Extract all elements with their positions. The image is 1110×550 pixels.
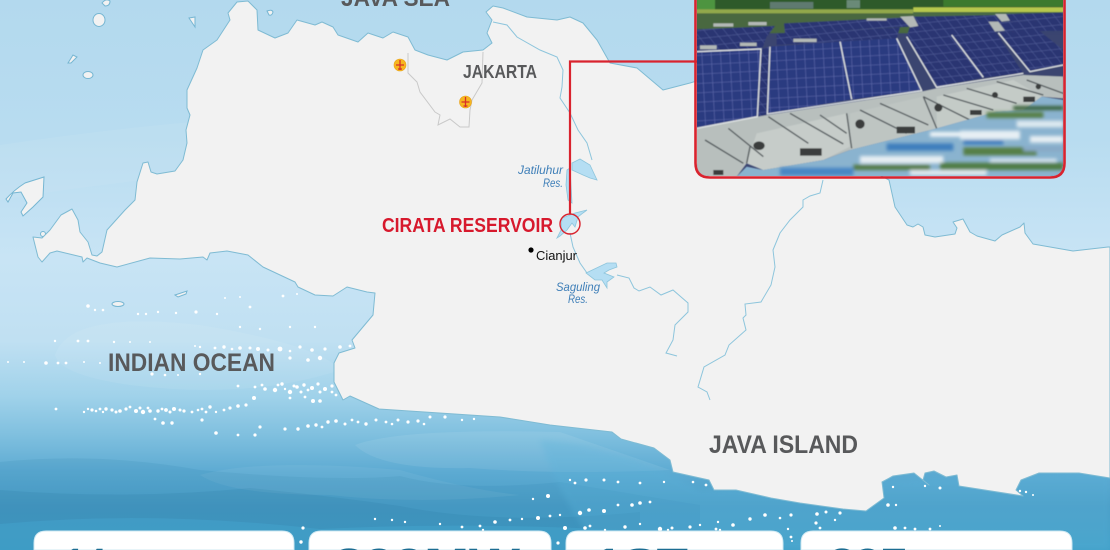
label: Indian Ocean: INDIAN OCEAN [108, 349, 275, 377]
stat card 3 [566, 531, 783, 550]
label: Cianjur with dot: Cianjur [536, 248, 578, 263]
photo frame [696, 0, 1064, 178]
label: Jatiluhur reservoir: Jatiluhur [517, 163, 564, 177]
sparkles on the water [7, 293, 1034, 545]
stat card 1 [34, 531, 294, 550]
Jakarta boundary [408, 52, 483, 127]
stat card 4 [801, 531, 1072, 550]
icon: airport south [460, 96, 472, 108]
rivers [493, 22, 823, 400]
photo: floating solar panels [693, 0, 1067, 180]
label: Saguling reservoir: Saguling [556, 280, 600, 294]
sea wave layers [0, 122, 1110, 550]
label: Jakarta: JAKARTA [463, 62, 537, 82]
front panels [697, 49, 761, 128]
label: Cirata Reservoir: CIRATA RESERVOIR [382, 215, 553, 237]
stat card 2 [309, 531, 551, 550]
marker: circle on Cirata and leader line [560, 62, 697, 234]
floats [693, 75, 1063, 180]
icon: airport west [394, 59, 406, 71]
label: Java Island: JAVA ISLAND [709, 431, 858, 459]
label: Jatiluhur reservoir [517, 163, 564, 190]
islands [6, 0, 273, 306]
label: Saguling reservoir: Res. [568, 292, 588, 306]
reservoirs [557, 159, 617, 288]
label: Jatiluhur reservoir: Res. [543, 176, 563, 190]
label: Saguling reservoir [556, 280, 600, 306]
water [737, 97, 1063, 180]
